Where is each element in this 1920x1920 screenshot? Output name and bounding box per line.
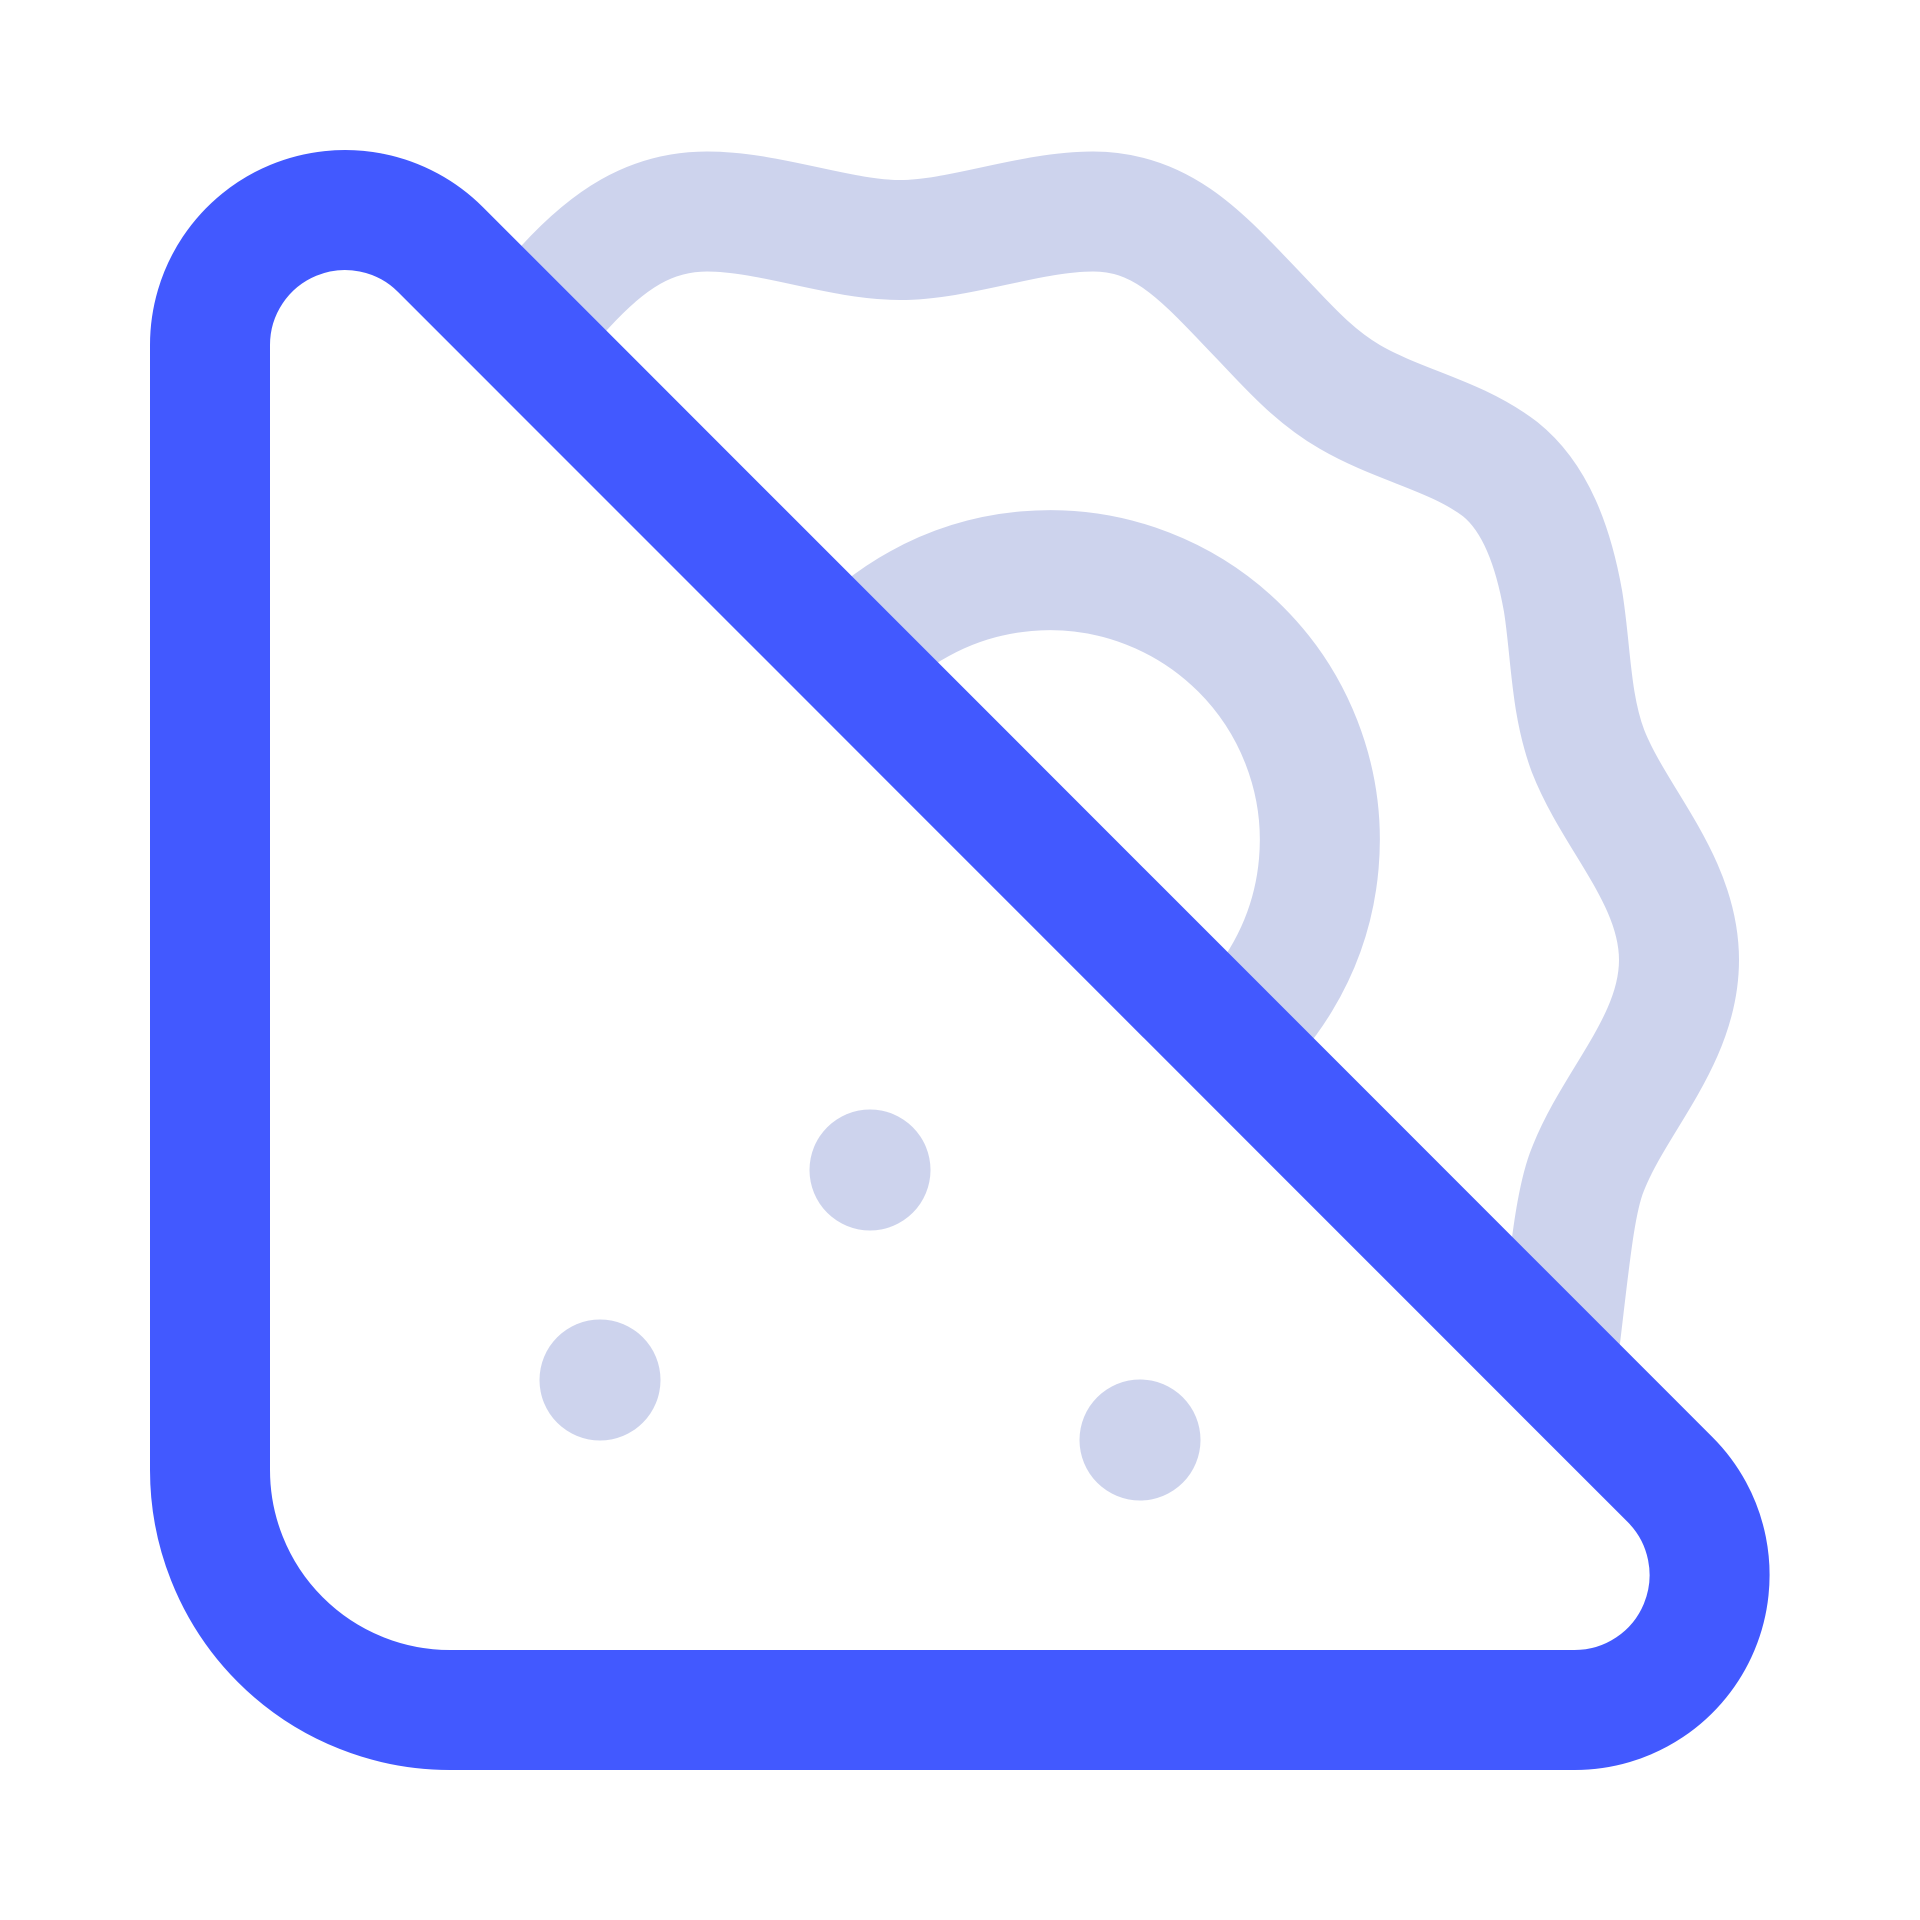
filling: ring xyxy=(829,570,1320,1061)
front slice: triangular outline xyxy=(210,210,1710,1710)
bread slice: wavy outline xyxy=(525,212,1679,1380)
crumbs: three dots xyxy=(540,1110,1200,1500)
